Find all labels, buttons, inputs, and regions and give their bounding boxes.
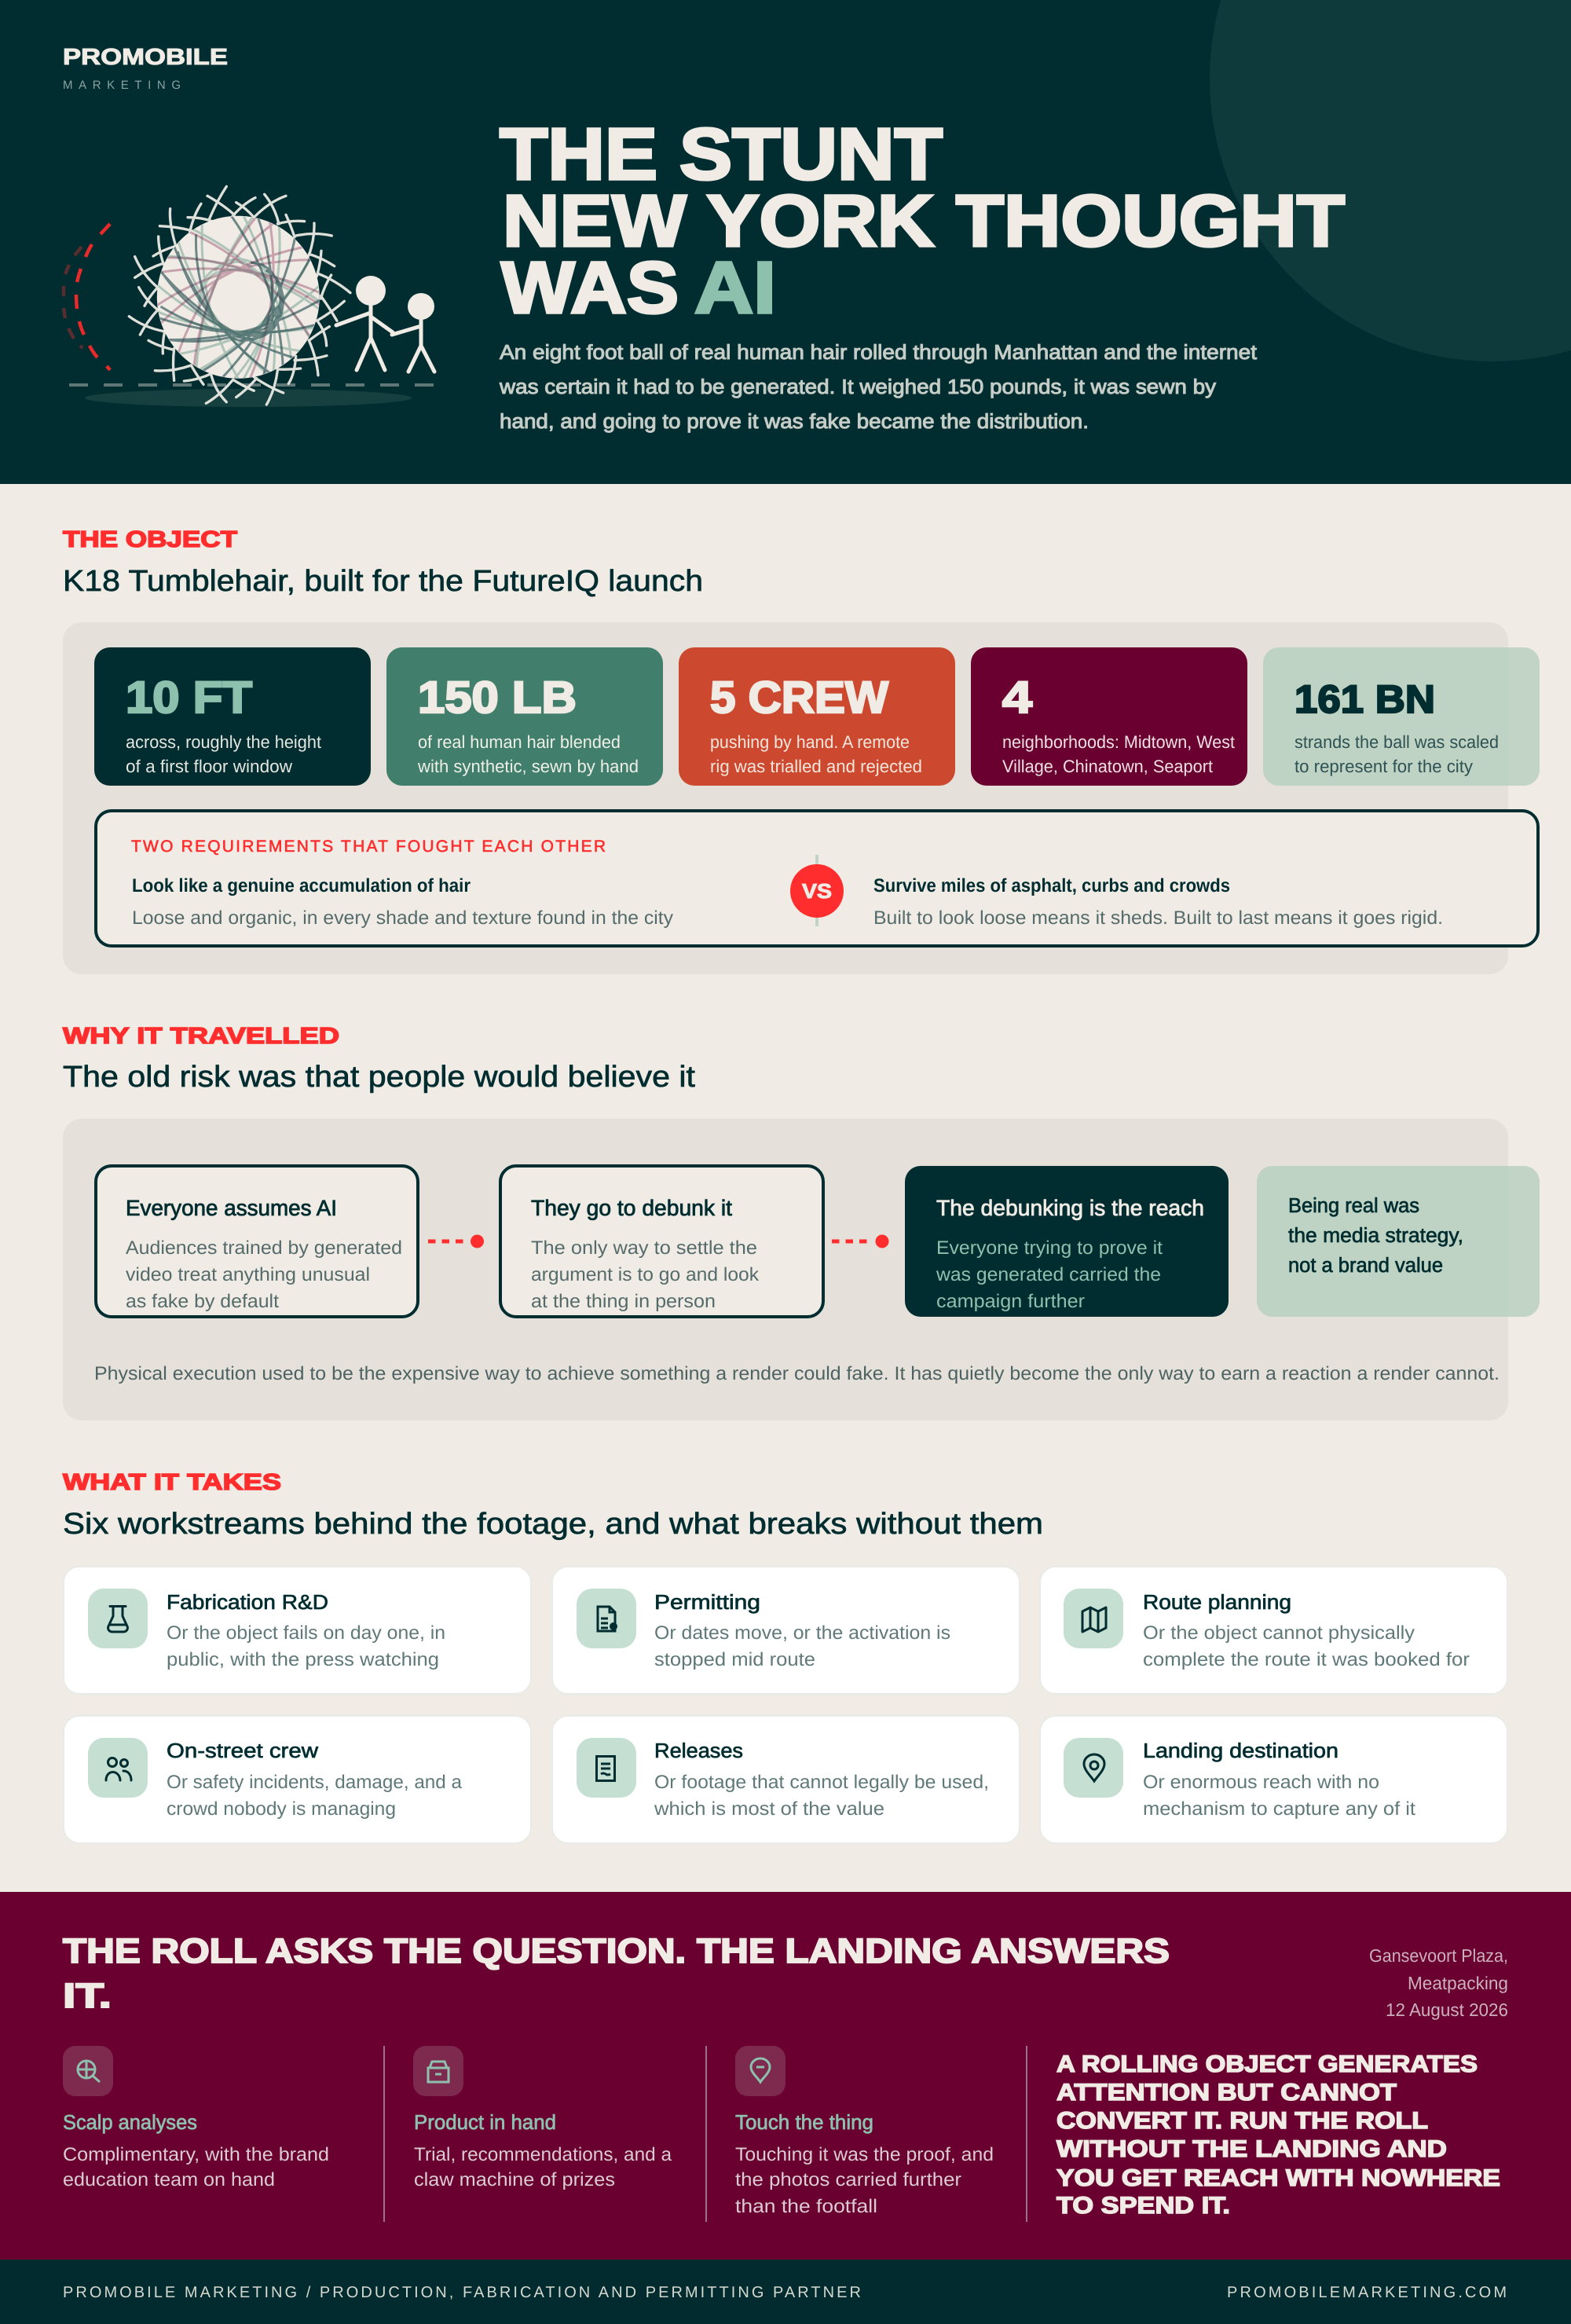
workstream: route planning	[1040, 1567, 1507, 1694]
illustration: hair ball with two figures	[64, 186, 434, 407]
main title: NEW YORK THOUGHT	[503, 180, 1345, 262]
step card: the debunking is the reach	[905, 1166, 1229, 1317]
location and date: Gansevoort Plaza,	[1369, 1945, 1508, 1966]
inner hair strands	[157, 216, 319, 379]
workstream: landing destination: Landing destination	[1143, 1739, 1338, 1762]
section heading: what it takes: WHAT IT TAKES	[63, 1470, 281, 1495]
footer bar: PROMOBILEMARKETING.COM	[1227, 2284, 1507, 2301]
workstream: on-street crew: crowd nobody is managing	[167, 1798, 396, 1820]
step card: they go to debunk it	[500, 1166, 823, 1317]
step card: the debunking is the reach: was generated carried the	[936, 1264, 1161, 1285]
callout: two requirements	[96, 811, 1538, 946]
intro paragraph: An eight foot ball of real human hair rolled through Manhattan and the internet	[500, 340, 1258, 364]
stat card: 5 crew	[679, 647, 955, 786]
workstream: releases: Or footage that cannot legally be used,	[654, 1772, 989, 1793]
workstream: landing destination	[1040, 1716, 1507, 1843]
stat card: 5 crew: pushing by hand. A remote	[710, 732, 910, 752]
ball	[157, 216, 320, 379]
requirement: look	[132, 875, 673, 929]
panel: hero header	[0, 0, 1571, 484]
stat card: 10 ft: across, roughly the height	[126, 732, 322, 752]
workstream: fabrication: public, with the press watching	[167, 1649, 439, 1670]
workstream: permitting	[552, 1567, 1020, 1694]
icon: pin with dash	[751, 2058, 770, 2082]
motion arcs	[64, 224, 110, 370]
step card: everyone assumes AI: as fake by default	[126, 1291, 279, 1312]
footer bar: PROMOBILE MARKETING / PRODUCTION, FABRICATION AND PERMITTING PARTNER	[63, 2284, 861, 2301]
divider	[1026, 2046, 1027, 2222]
section heading: what it takes	[63, 1470, 1043, 1541]
step card: they go to debunk it: argument is to go and look	[531, 1264, 760, 1285]
figure: adult	[336, 276, 393, 370]
main title: WAS	[501, 247, 679, 328]
outer hair strands	[129, 186, 350, 405]
panel footnote: Physical execution used to be the expensive way to achieve something a render could fake. It has quietly become the only way to earn a reaction a render cannot.	[94, 1363, 1500, 1384]
icon: people	[106, 1758, 131, 1780]
column: product in hand	[413, 2046, 672, 2190]
figure: child	[392, 293, 434, 372]
icon: permit document	[598, 1607, 617, 1631]
workstream: permitting: Or dates move, or the activation is	[654, 1622, 950, 1644]
workstream: releases	[552, 1716, 1020, 1843]
location and date: 12 August 2026	[1386, 2000, 1508, 2020]
workstream: permitting: stopped mid route	[654, 1649, 815, 1670]
vs badge	[790, 855, 844, 926]
logo: PROMOBILE	[63, 45, 228, 70]
main title: AI	[694, 247, 776, 328]
section heading: the object: THE OBJECT	[63, 527, 237, 552]
panel: the object	[63, 622, 1540, 974]
closing statement: TO SPEND IT.	[1056, 2193, 1230, 2219]
step card: they go to debunk it: The only way to settle the	[531, 1237, 757, 1259]
panel: the landing	[0, 1892, 1571, 2260]
workstream: landing destination: Or enormous reach with no	[1143, 1772, 1379, 1793]
main title: THE STUNT	[500, 113, 943, 195]
closing statement: A ROLLING OBJECT GENERATES	[1056, 2051, 1478, 2077]
stat card: 4 neighborhoods: 4	[1002, 673, 1032, 723]
stat card: 10 ft	[94, 647, 371, 786]
requirement: look: Look like a genuine accumulation of hair	[132, 875, 471, 896]
closing statement: WITHOUT THE LANDING AND	[1056, 2136, 1447, 2162]
icon: box	[428, 2062, 449, 2082]
step card: everyone assumes AI	[96, 1166, 418, 1317]
column: scalp analyses: Complimentary, with the brand	[63, 2144, 329, 2165]
section heading: the object	[63, 527, 703, 598]
column: scalp analyses: education team on hand	[63, 2169, 275, 2190]
stat card: 150 lb: 150 LB	[418, 673, 577, 723]
logo	[63, 45, 228, 92]
stat card: 10 ft: 10 FT	[126, 673, 252, 723]
closing statement: CONVERT IT. RUN THE ROLL	[1056, 2108, 1428, 2134]
column: touch the thing: Touch the thing	[735, 2110, 873, 2134]
workstream: landing destination: mechanism to capture any of it	[1143, 1798, 1415, 1820]
closing statement: YOU GET REACH WITH NOWHERE	[1056, 2165, 1500, 2191]
column: scalp analyses: Scalp analyses	[63, 2110, 197, 2134]
section heading: what it takes: Six workstreams behind the footage, and what breaks without them	[63, 1508, 1043, 1541]
workstream: releases: Releases	[654, 1739, 743, 1762]
stat card: 4 neighborhoods: neighborhoods: Midtown, West	[1002, 732, 1236, 752]
section heading: why it travelled	[63, 1024, 695, 1094]
section heading: the object: K18 Tumblehair, built for the FutureIQ launch	[63, 565, 703, 598]
landing heading: THE ROLL ASKS THE QUESTION. THE LANDING ANSWERS	[63, 1932, 1170, 1970]
arrow: step 1 to step 2	[428, 1235, 484, 1248]
requirement: survive	[873, 875, 1443, 929]
step card: the debunking is the reach: The debunking is the reach	[936, 1196, 1204, 1220]
section heading: why it travelled: The old risk was that people would believe it	[63, 1061, 695, 1094]
icon: map pin	[1084, 1754, 1104, 1781]
icon: flask	[108, 1606, 127, 1632]
step card: they go to debunk it: They go to debunk it	[531, 1196, 732, 1220]
workstream: permitting: Permitting	[654, 1590, 760, 1614]
step card: everyone assumes AI: Audiences trained by generated	[126, 1237, 402, 1259]
stat card: 161 bn: strands the ball was scaled	[1295, 732, 1499, 752]
stat card: 4 neighborhoods: Village, Chinatown, Seaport	[1002, 757, 1214, 776]
location and date	[1369, 1945, 1508, 2020]
section heading: why it travelled: WHY IT TRAVELLED	[63, 1024, 339, 1049]
landing heading	[63, 1932, 1170, 2015]
step card: the debunking is the reach: Everyone trying to prove it	[936, 1237, 1163, 1259]
icon: map	[1082, 1607, 1106, 1632]
column: touch the thing: than the footfall	[735, 2196, 877, 2217]
decorative circle top right	[1210, 0, 1571, 361]
workstream: route planning: Or the object cannot physically	[1143, 1622, 1415, 1644]
icon: release form	[597, 1757, 614, 1780]
requirement: survive: Survive miles of asphalt, curbs and crowds	[873, 875, 1230, 896]
footer bar	[0, 2260, 1571, 2324]
ground shadow	[85, 389, 412, 407]
requirement: look: Loose and organic, in every shade and texture found in the city	[132, 907, 673, 929]
stat card: 150 lb: of real human hair blended	[418, 732, 621, 752]
step card: the debunking is the reach: campaign further	[936, 1291, 1085, 1312]
ground dashes	[69, 383, 434, 387]
column: product in hand: Product in hand	[414, 2110, 556, 2134]
stat card: 161 bn: to represent for the city	[1295, 757, 1474, 776]
stat card: 150 lb	[386, 647, 663, 786]
column: touch the thing: Touching it was the proof, and	[735, 2144, 994, 2165]
workstream: route planning: Route planning	[1143, 1590, 1291, 1614]
column: touch the thing: the photos carried further	[735, 2169, 961, 2190]
step card: everyone assumes AI: Everyone assumes AI	[126, 1196, 337, 1220]
takeaway card	[1257, 1166, 1540, 1317]
stat card: 161 bn	[1263, 647, 1540, 786]
logo: MARKETING	[63, 79, 181, 92]
intro paragraph	[499, 340, 1258, 433]
panel: six workstreams	[64, 1567, 1507, 1843]
takeaway card: the media strategy,	[1288, 1223, 1463, 1247]
icon: magnifier	[78, 2061, 100, 2082]
intro paragraph: hand, and going to prove it was fake became the distribution.	[500, 409, 1089, 433]
arrow: step 2 to step 3	[832, 1235, 889, 1248]
workstream: fabrication: Or the object fails on day one, in	[167, 1622, 445, 1644]
step card: they go to debunk it: at the thing in person	[531, 1291, 716, 1312]
panel: why it travelled	[63, 1119, 1540, 1420]
workstream: fabrication: Fabrication R&D	[167, 1590, 328, 1614]
workstream: on-street crew: On-street crew	[167, 1739, 318, 1762]
closing statement	[1056, 2051, 1500, 2219]
stat card: 4 neighborhoods	[971, 647, 1247, 786]
closing statement: ATTENTION BUT CANNOT	[1056, 2080, 1397, 2106]
workstream: route planning: complete the route it was booked for	[1143, 1649, 1470, 1670]
vs badge: VS	[802, 879, 832, 903]
step card: everyone assumes AI: video treat anything unusual	[126, 1264, 370, 1285]
landing heading: IT.	[63, 1977, 112, 2015]
divider	[383, 2046, 385, 2222]
callout: two requirements: TWO REQUIREMENTS THAT FOUGHT EACH OTHER	[131, 838, 606, 856]
column: scalp analyses	[63, 2046, 329, 2190]
stat card: 10 ft: of a first floor window	[126, 757, 293, 776]
workstream: on-street crew: Or safety incidents, damage, and a	[167, 1772, 463, 1793]
column: product in hand: Trial, recommendations, and a	[414, 2144, 672, 2165]
location and date: Meatpacking	[1408, 1973, 1508, 1993]
stat card: 5 crew: rig was trialled and rejected	[710, 757, 922, 776]
column: product in hand: claw machine of prizes	[414, 2169, 615, 2190]
intro paragraph: was certain it had to be generated. It weighed 150 pounds, it was sewn by	[499, 375, 1216, 398]
stat card: 5 crew: 5 CREW	[710, 673, 888, 723]
stat card: 161 bn: 161 BN	[1295, 677, 1435, 721]
workstream: releases: which is most of the value	[654, 1798, 884, 1820]
takeaway card: Being real was	[1288, 1193, 1419, 1217]
workstream: fabrication	[64, 1567, 531, 1694]
stat card: 150 lb: with synthetic, sewn by hand	[417, 757, 639, 776]
requirement: survive: Built to look loose means it sheds. Built to last means it goes rigid.	[873, 907, 1443, 929]
main title	[500, 113, 1345, 328]
divider	[705, 2046, 707, 2222]
workstream: on-street crew	[64, 1716, 531, 1843]
takeaway card: not a brand value	[1288, 1253, 1443, 1277]
column: touch the thing	[735, 2046, 994, 2217]
